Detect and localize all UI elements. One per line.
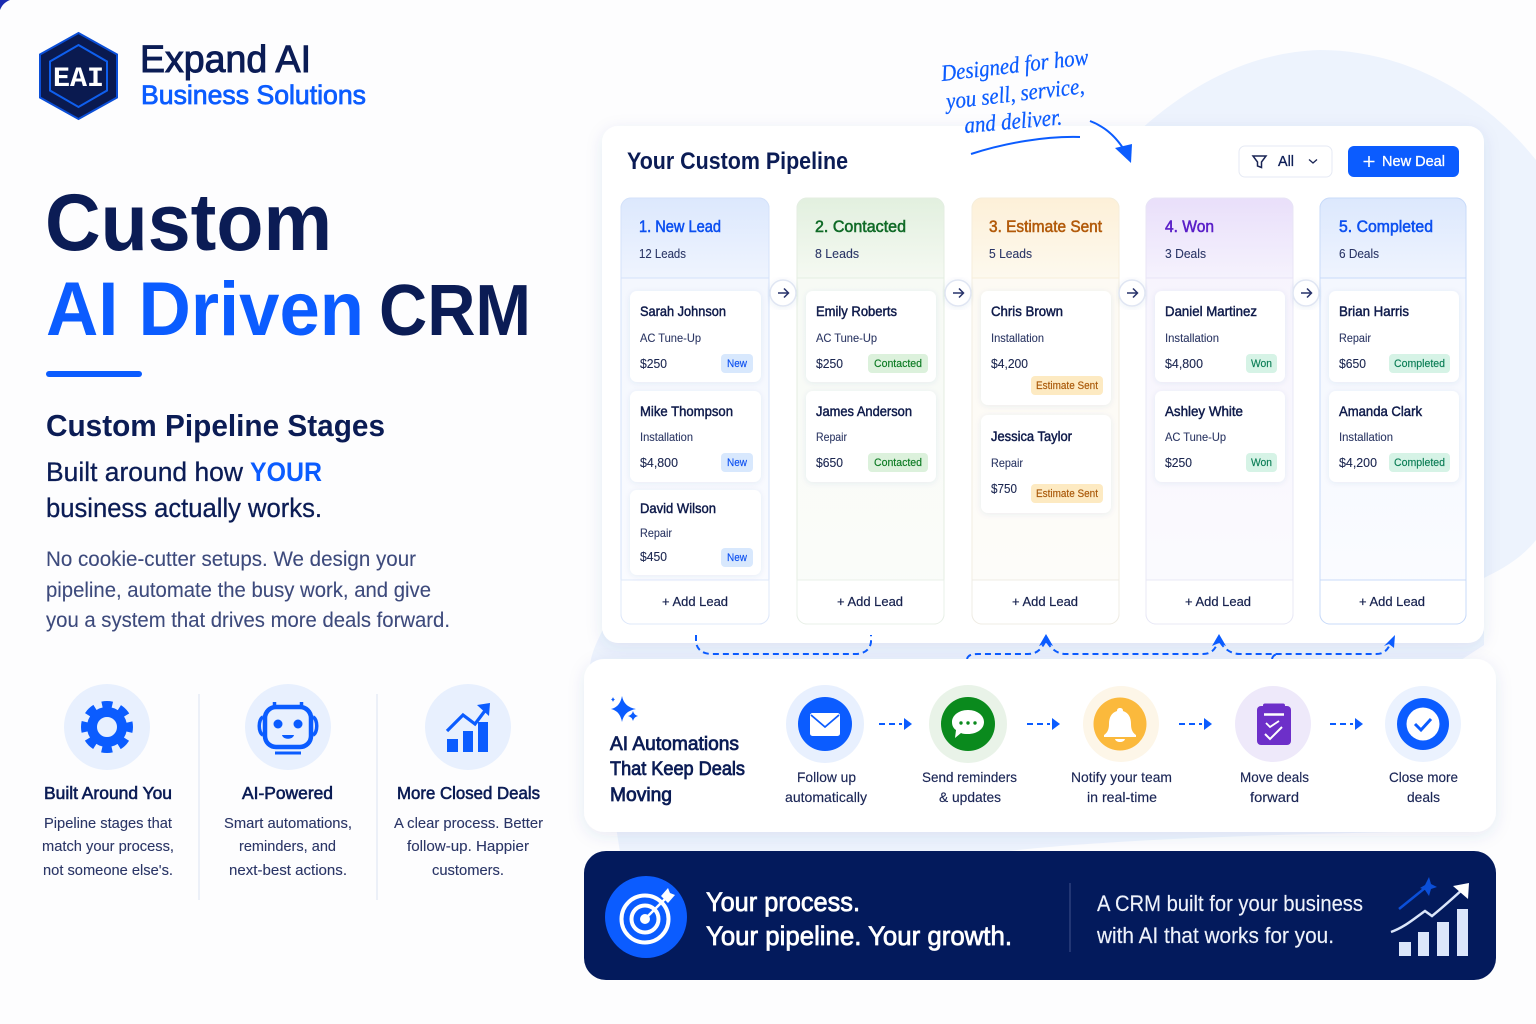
column: Completed: [1320, 198, 1466, 624]
card: Amanda Clark: Completed: [1394, 457, 1445, 469]
step: close deals: deals: [1407, 789, 1440, 805]
card: Ashley White: [1155, 391, 1285, 482]
banner headline: Your process.: [706, 887, 860, 917]
card: Chris Brown: Estimate Sent: [1036, 380, 1098, 392]
column: Contacted: [797, 198, 944, 624]
card: Ashley White: AC Tune-Up: [1165, 430, 1226, 444]
column: Won: [1146, 198, 1293, 624]
icon: robot: [245, 684, 331, 770]
feature: AI-Powered: next-best actions.: [229, 862, 347, 879]
lead text: Built around how: [46, 457, 243, 487]
card: Brian Harris: Completed: [1394, 358, 1445, 370]
logo name: Expand AI: [140, 39, 311, 81]
feature: Built Around You: [42, 684, 174, 879]
description paragraph: pipeline, automate the busy work, and give: [46, 578, 431, 602]
title: [45, 178, 531, 352]
banner headline: Your pipeline. Your growth.: [706, 921, 1012, 951]
new deal button: [1348, 146, 1459, 177]
column: Estimate Sent: 3. Estimate Sent: [989, 218, 1102, 236]
card: James Anderson: $650: [816, 455, 843, 470]
logo hexagon badge: EAI: [53, 64, 104, 95]
arrow: [1330, 718, 1363, 730]
card: Mike Thompson: $4,800: [640, 455, 678, 470]
feature: More Closed Deals: [394, 684, 543, 879]
description paragraph: you a system that drives more deals forward.: [46, 608, 450, 632]
card: Emily Roberts: Contacted: [874, 358, 922, 370]
panel: AI automations: [584, 659, 1496, 832]
column: Contacted: + Add Lead: [837, 594, 903, 609]
column: Contacted: 2. Contacted: [815, 218, 906, 236]
stage arrows: [770, 280, 1319, 306]
step: close deals: Close more: [1389, 769, 1458, 785]
card: Jessica Taylor: $750: [991, 481, 1017, 496]
icon: sparkles: [611, 696, 638, 722]
card: David Wilson: Repair: [640, 526, 672, 540]
column: Estimate Sent: 5 Leads: [989, 246, 1032, 261]
automations heading: [610, 734, 745, 806]
card: Sarah Johnson: $250: [640, 356, 667, 371]
subtitle: Custom Pipeline Stages: [46, 408, 385, 443]
feature: AI-Powered: AI-Powered: [242, 783, 333, 803]
card: Emily Roberts: Emily Roberts: [816, 303, 897, 319]
banner tagline: [1096, 891, 1363, 948]
card: Brian Harris: Repair: [1339, 331, 1371, 345]
filter dropdown: [1239, 146, 1332, 177]
title: Custom: [45, 178, 332, 268]
card: David Wilson: $450: [640, 549, 667, 564]
card: James Anderson: Contacted: [874, 457, 922, 469]
card: Ashley White: Ashley White: [1165, 403, 1243, 419]
pipeline heading: Your Custom Pipeline: [627, 148, 848, 175]
column: Won: 3 Deals: [1165, 246, 1206, 261]
step: move deals: [1235, 686, 1311, 805]
automations heading: That Keep Deals: [610, 759, 745, 780]
lead text: YOUR: [250, 457, 322, 487]
column: Completed: 6 Deals: [1339, 246, 1379, 261]
card: Daniel Martinez: Won: [1251, 358, 1272, 370]
card: Chris Brown: Installation: [991, 331, 1044, 345]
card: Chris Brown: Chris Brown: [991, 303, 1063, 319]
banner tagline: A CRM built for your business: [1097, 891, 1363, 916]
card: Daniel Martinez: $4,800: [1165, 356, 1203, 371]
card: Mike Thompson: Mike Thompson: [640, 403, 733, 419]
banner tagline: with AI that works for you.: [1096, 923, 1334, 948]
card: Sarah Johnson: AC Tune-Up: [640, 331, 701, 345]
card: Amanda Clark: $4,200: [1339, 455, 1377, 470]
step: send reminders: [922, 685, 1017, 805]
handwritten callout: Designed for how: [939, 44, 1090, 86]
card: Ashley White: $250: [1165, 455, 1192, 470]
filter dropdown: All: [1278, 154, 1294, 170]
feature: Built Around You: match your process,: [42, 838, 174, 855]
handwritten callout: [939, 44, 1090, 154]
arrow: [879, 718, 912, 730]
card: Jessica Taylor: Estimate Sent: [1036, 488, 1098, 500]
logo hexagon badge: [40, 33, 117, 119]
card: James Anderson: [806, 391, 936, 482]
card: Emily Roberts: AC Tune-Up: [816, 331, 877, 345]
step: follow up: Follow up: [797, 769, 856, 785]
column: Completed: + Add Lead: [1359, 594, 1425, 609]
handwritten callout: and deliver.: [963, 105, 1063, 138]
step: close deals: [1385, 686, 1461, 805]
step: send reminders: Send reminders: [922, 769, 1017, 785]
card: James Anderson: James Anderson: [816, 403, 912, 419]
feature: Built Around You: Pipeline stages that: [44, 815, 173, 832]
step: follow up: automatically: [785, 789, 867, 805]
step: notify team: [1071, 686, 1172, 805]
card: Amanda Clark: Amanda Clark: [1339, 403, 1423, 419]
card: Mike Thompson: [630, 391, 761, 482]
card: David Wilson: New: [727, 552, 747, 564]
step: move deals: Move deals: [1240, 769, 1309, 785]
icon: growth chart with arrow: [1391, 877, 1469, 956]
description paragraph: No cookie-cutter setups. We design your: [46, 547, 416, 571]
arrow: [1179, 718, 1212, 730]
column: Contacted: 8 Leads: [815, 246, 859, 261]
card: Amanda Clark: [1329, 391, 1459, 482]
title: CRM: [379, 271, 531, 351]
card: Brian Harris: $650: [1339, 356, 1366, 371]
feature: More Closed Deals: follow-up. Happier: [407, 838, 529, 855]
card: David Wilson: [630, 490, 761, 575]
column: Completed: 5. Completed: [1339, 218, 1433, 236]
feature: AI-Powered: reminders, and: [239, 838, 336, 855]
step: notify team: in real-time: [1087, 789, 1157, 805]
step: follow up: [785, 685, 867, 805]
automations heading: Moving: [610, 785, 672, 806]
logo: [40, 33, 311, 119]
card: James Anderson: Repair: [816, 430, 847, 444]
card: Ashley White: Won: [1251, 457, 1272, 469]
step: notify team: Notify your team: [1071, 769, 1172, 785]
column: Estimate Sent: + Add Lead: [1012, 594, 1078, 609]
card: Sarah Johnson: Sarah Johnson: [640, 303, 726, 319]
lead text: business actually works.: [46, 493, 322, 523]
card: Daniel Martinez: Installation: [1165, 331, 1219, 345]
column: New Lead: + Add Lead: [662, 594, 728, 609]
banner headline: [706, 887, 1012, 951]
arrow: callout to pipeline: [1090, 121, 1132, 163]
lead text: [46, 457, 322, 523]
column: Won: 4. Won: [1165, 218, 1214, 236]
card: Jessica Taylor: Repair: [991, 456, 1023, 470]
column: New Lead: 1. New Lead: [639, 218, 721, 236]
feature: More Closed Deals: customers.: [432, 862, 504, 879]
description paragraph: [46, 547, 450, 632]
card: Daniel Martinez: [1155, 291, 1285, 382]
card: Emily Roberts: [806, 291, 936, 382]
title underline: [46, 371, 142, 377]
dashed connectors: [696, 635, 1391, 659]
card: Amanda Clark: Installation: [1339, 430, 1393, 444]
column: Won: + Add Lead: [1185, 594, 1251, 609]
handwritten callout: you sell, service,: [943, 73, 1086, 114]
card: Jessica Taylor: Jessica Taylor: [991, 428, 1072, 444]
feature: More Closed Deals: A clear process. Better: [394, 815, 543, 832]
column: New Lead: 12 Leads: [639, 246, 686, 261]
card: Chris Brown: [981, 291, 1111, 405]
icon: gear: [64, 684, 150, 770]
card: Emily Roberts: $250: [816, 356, 843, 371]
banner: [584, 851, 1496, 980]
icon: target: [605, 876, 687, 958]
feature: AI-Powered: Smart automations,: [224, 815, 352, 832]
card: Mike Thompson: Installation: [640, 430, 693, 444]
connector arrowheads: [1039, 634, 1395, 648]
step: move deals: forward: [1250, 789, 1299, 805]
card: Sarah Johnson: New: [727, 358, 747, 370]
column: New Lead: [621, 198, 769, 624]
logo tagline: Business Solutions: [141, 80, 366, 110]
automations heading: AI Automations: [610, 734, 739, 755]
column: Estimate Sent: [972, 198, 1119, 624]
icon: growth chart: [425, 684, 511, 770]
card: Chris Brown: $4,200: [991, 356, 1028, 371]
feature: AI-Powered: [224, 684, 352, 879]
new deal button: New Deal: [1382, 154, 1445, 170]
card: Brian Harris: [1329, 291, 1459, 382]
card: Brian Harris: Brian Harris: [1339, 303, 1409, 319]
card: Jessica Taylor: [981, 415, 1111, 513]
panel: pipeline: [602, 126, 1484, 643]
card: David Wilson: David Wilson: [640, 500, 716, 516]
arrow: [1027, 718, 1060, 730]
feature: Built Around You: not someone else's.: [43, 862, 173, 879]
feature: Built Around You: Built Around You: [44, 783, 172, 803]
step: send reminders: & updates: [939, 789, 1001, 805]
card: Mike Thompson: New: [727, 457, 747, 469]
feature: More Closed Deals: More Closed Deals: [397, 783, 540, 803]
title: AI Driven: [46, 267, 364, 352]
card: Sarah Johnson: [630, 291, 761, 382]
card: Daniel Martinez: Daniel Martinez: [1165, 303, 1257, 319]
